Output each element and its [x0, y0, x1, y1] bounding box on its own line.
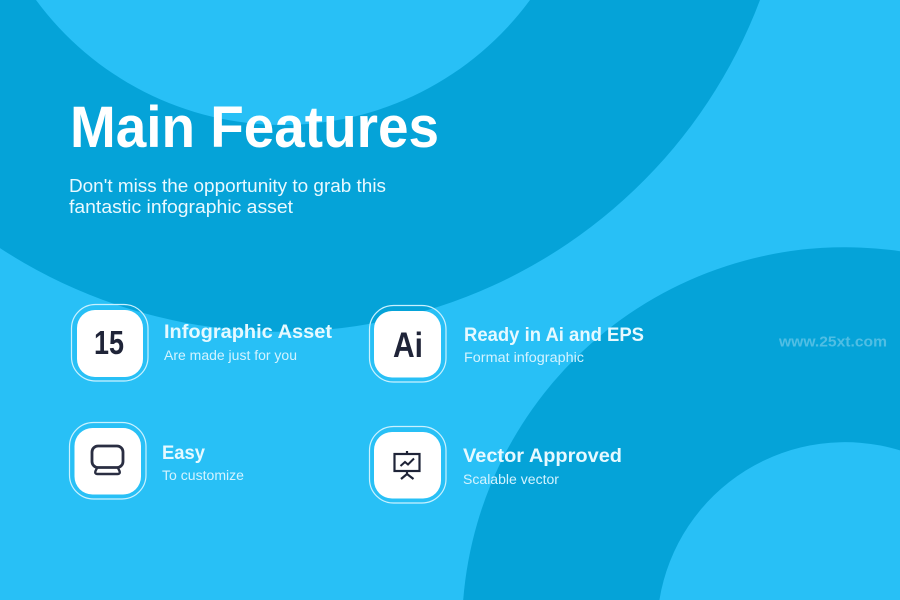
description: Are made just for you: Are made just for you — [164, 348, 297, 363]
icon: 15 badge — [72, 304, 148, 381]
feature: Easy — [70, 422, 244, 499]
subtitle: Don't miss the opportunity to grab this — [69, 176, 386, 196]
title: Main Features — [70, 95, 439, 160]
description: Scalable vector: Scalable vector — [463, 472, 560, 487]
feature: 15 Infographic Asset — [72, 304, 333, 381]
background ring: top left — [0, 0, 760, 332]
heading: Vector Approved: Vector Approved — [463, 446, 622, 467]
icon: Ai badge: Ai — [393, 326, 423, 365]
description: Format infographic: Format infographic — [464, 350, 584, 365]
icon: presentation board — [370, 426, 446, 503]
subtitle: fantastic infographic asset — [69, 197, 293, 217]
watermark: www.25xt.com — [778, 334, 887, 350]
feature: Vector Approved — [370, 426, 622, 503]
icon: 15 badge: 15 — [94, 324, 124, 361]
description: To customize: To customize — [162, 468, 244, 483]
feature: Ai Ready in Ai and EPS — [370, 306, 644, 382]
background ring: bottom right — [463, 247, 900, 600]
heading: Infographic Asset: Infographic Asset — [164, 322, 333, 343]
icon: monitor — [70, 422, 146, 499]
icon: Ai badge — [370, 306, 446, 382]
subtitle — [69, 176, 386, 217]
heading: Easy: Easy — [162, 443, 205, 464]
heading: Ready in Ai and EPS: Ready in Ai and EPS — [464, 325, 644, 346]
